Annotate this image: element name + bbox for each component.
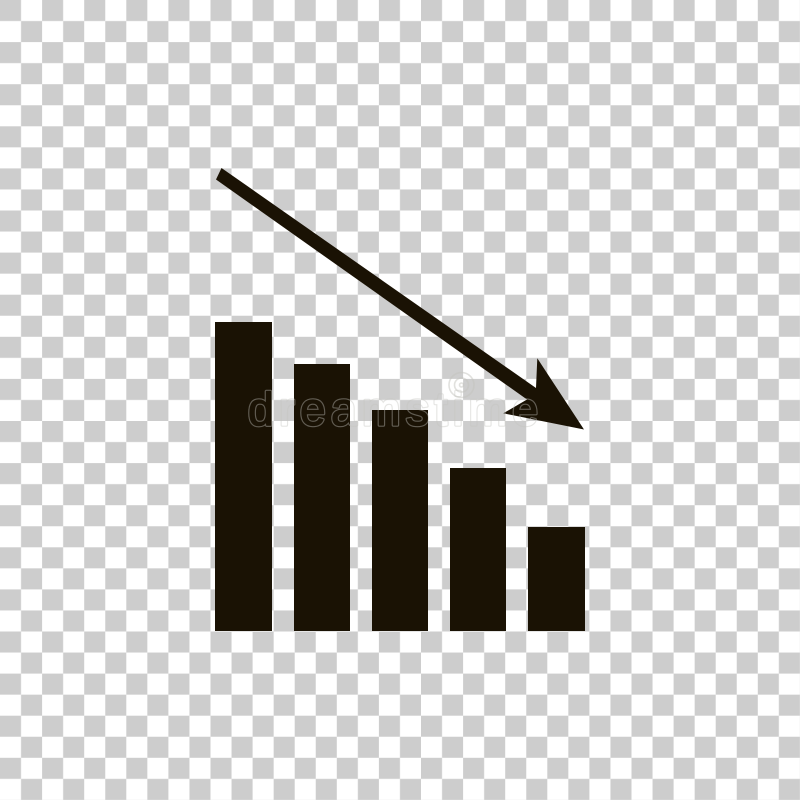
watermark text band: [248, 390, 538, 428]
bar 2: [294, 364, 350, 631]
bar 4: [450, 468, 506, 631]
bar 1: [215, 322, 272, 631]
bar 5: [528, 527, 585, 631]
bar chart: [215, 322, 585, 631]
watermark: [248, 372, 538, 428]
bar 3: [372, 410, 428, 631]
downward trend arrow: [216, 168, 584, 430]
watermark spiral: [449, 372, 474, 398]
